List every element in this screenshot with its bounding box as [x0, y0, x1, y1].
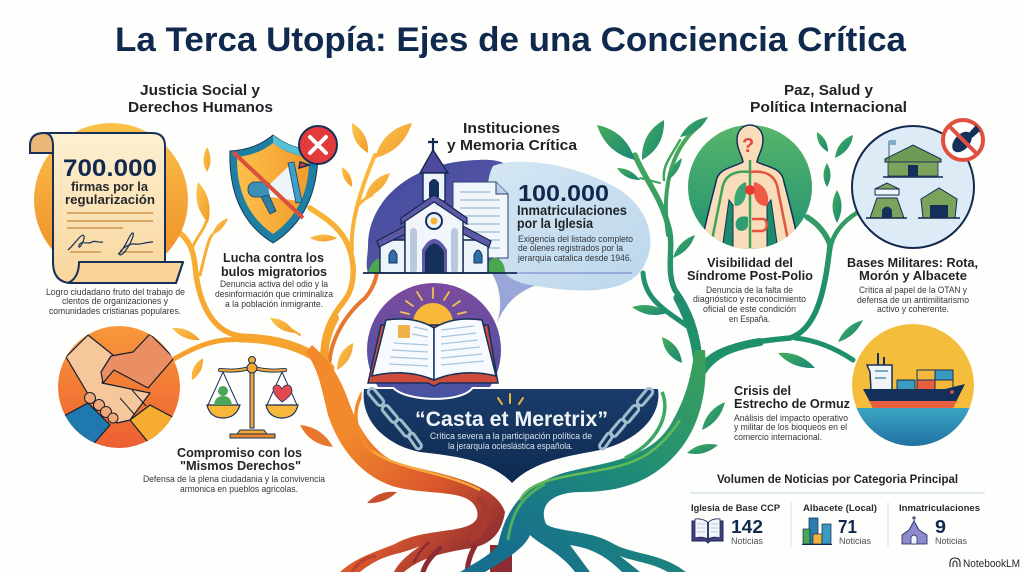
icon: church [363, 138, 517, 273]
heading: instituciones: y Memoria Crítica [447, 137, 578, 154]
description: Crítica severa a la participación política de [430, 431, 592, 441]
text: bases militares: activo y coherente. [877, 304, 949, 314]
stat: inmatriculaciones: 9 [935, 517, 946, 537]
text: crisis de ormuz: y militar de los bioqueos en el [734, 422, 847, 432]
panel: lucha contra los bulos: bulos migratorios [221, 264, 327, 279]
fingers [84, 392, 118, 423]
panel: institutions blob [367, 160, 650, 323]
heading: justicia social: Justicia Social y [140, 82, 261, 99]
panel heading: Volumen de Noticias por Categoria Principal [717, 472, 958, 486]
icon: chain left [367, 387, 423, 450]
left branches [172, 155, 377, 378]
text: 100.000 inmatriculaciones: Exigencia del listado completo [518, 234, 633, 244]
text: 100.000 inmatriculaciones: 100.000 [518, 180, 609, 206]
text: crisis de ormuz: Crisis del [734, 383, 791, 398]
text: visibilidad: Denuncia de la falta de [706, 285, 793, 295]
text: 100.000 inmatriculaciones: de olenes registrados por la [518, 243, 624, 253]
text: 100.000 inmatriculaciones: jerarquia catalica desde 1946. [517, 253, 632, 263]
arm gaps [722, 200, 778, 250]
left trunk and roots [306, 345, 505, 572]
text: 100.000 inmatriculaciones [517, 180, 633, 263]
panel: 700.000 firmas: comunidades cristianas populares. [49, 306, 181, 316]
text: visibilidad: en España. [729, 314, 770, 324]
text: compromiso: armonica en pueblos agricolas. [180, 484, 298, 494]
right arm and thumb [101, 334, 174, 388]
icon: chain right [598, 387, 654, 450]
text: visibilidad [687, 255, 813, 324]
sun rays [498, 394, 523, 404]
icon: body post-polio: ? [742, 135, 754, 157]
signatures [68, 233, 153, 255]
text: compromiso [143, 445, 326, 494]
left arm and hand [66, 335, 150, 423]
purple backdrop [367, 160, 520, 273]
text: compromiso: Defensa de la plena ciudadania y la convivencia [143, 474, 326, 484]
panel: volumen de noticias [690, 472, 985, 547]
icon: military bases [852, 126, 974, 248]
light blue callout [488, 162, 650, 291]
panel: lucha contra los bulos: desinformación que criminaliza [215, 289, 334, 299]
right leaves [597, 117, 863, 454]
panel: 700.000 firmas: clentos de organizaciones y [62, 296, 168, 306]
text: 100.000 inmatriculaciones: por la Iglesia [517, 216, 593, 231]
orange circle [34, 123, 188, 277]
panel: 700.000 firmas [30, 123, 188, 316]
yellow sleeve [130, 405, 178, 442]
panel: lucha contra los bulos [215, 126, 337, 309]
title: La Terca Utopía: Ejes de una Conciencia Crítica [115, 21, 907, 59]
panel: casta et meretrix banner [364, 389, 658, 483]
text: crisis de ormuz [734, 383, 850, 442]
text: bases militares: Bases Militares: Rota, [847, 255, 978, 270]
logo: notebooklm: NotebookLM [963, 558, 1020, 570]
icon: document [453, 182, 508, 258]
heading: paz, salud: Política Internacional [750, 99, 907, 116]
description: Logro ciudadano fruto del trabajo de [46, 287, 185, 297]
text: compromiso: "Mismos Derechos" [180, 458, 301, 473]
barracks [885, 145, 941, 162]
text: bases militares: Morón y Albacete [859, 268, 967, 283]
speech tail [490, 270, 542, 323]
icon: scales of justice [207, 356, 298, 438]
trunk centre stem [490, 545, 512, 572]
heading: instituciones [447, 120, 578, 154]
rule [690, 492, 985, 494]
stat: inmatriculaciones [899, 503, 980, 546]
stat: inmatriculaciones: Noticias [935, 536, 967, 546]
panel: lucha contra los bulos: a la población inmigrante. [225, 299, 323, 309]
stat: inmatriculaciones: Inmatriculaciones [899, 503, 980, 514]
text: crisis de ormuz: Estrecho de Ormuz [734, 396, 850, 411]
text: 100.000 inmatriculaciones: Inmatriculaciones [517, 203, 627, 218]
right branches [635, 125, 858, 390]
text lines [67, 213, 153, 252]
panel: casta et meretrix banner: la jerarquía ocieslástica española. [448, 441, 573, 451]
scroll [30, 133, 183, 283]
watchtower [875, 183, 899, 189]
text: visibilidad: oficial de este condición [703, 304, 796, 314]
icon: red alert bubble [299, 126, 337, 168]
tent [921, 188, 957, 218]
icon: body post-polio [688, 125, 812, 250]
text: bases militares: Crítica al papel de la OTAN y [859, 285, 967, 295]
divider line [517, 272, 632, 274]
stat: albacete: Albacete (Local) [803, 503, 877, 514]
text: bases militares: defensa de un antimilitarismo [857, 295, 969, 305]
stat: albacete: Noticias [839, 536, 871, 546]
icon: handshake [58, 326, 180, 448]
text: compromiso: Compromiso con los [177, 445, 302, 460]
quote: “Casta et Meretrix” [415, 407, 608, 431]
icon: no bomb [943, 120, 983, 160]
subheading: Lucha contra los [223, 250, 324, 265]
left leaves [172, 123, 412, 503]
icon: shield [230, 135, 318, 243]
hand lines [120, 390, 146, 414]
panel: 700.000 firmas: regularización [65, 193, 155, 207]
text: crisis de ormuz: Análisis del impacto operativo [734, 413, 848, 423]
stat: iglesia de base: Noticias [731, 536, 763, 546]
description: Denuncia activa del odio y la [220, 279, 329, 289]
big number: 700.000 [63, 155, 157, 182]
tree: cool right half [460, 117, 863, 572]
panel: 700.000 firmas: firmas por la [71, 180, 149, 194]
icon: container ship [850, 324, 980, 448]
heading: justicia social [128, 82, 273, 116]
text: visibilidad: Visibilidad del [707, 255, 793, 270]
text: visibilidad: Síndrome Post-Polio [687, 268, 813, 283]
text: visibilidad: diagnóstico y reconocimiento [693, 294, 806, 304]
icon: open book with sun [367, 283, 501, 417]
heading: paz, salud [750, 82, 907, 116]
text: bases militares [847, 255, 978, 314]
right trunk and roots [460, 350, 706, 572]
banner shape [364, 389, 658, 483]
heading: instituciones: Instituciones [463, 120, 560, 137]
stat: iglesia de base [691, 503, 781, 546]
stat: albacete: 71 [838, 517, 857, 537]
tree: warm left half [172, 123, 512, 572]
heading: paz, salud: Paz, Salud y [784, 82, 874, 99]
stat: iglesia de base: Iglesia de Base CCP [691, 503, 781, 514]
stat: iglesia de base: 142 [731, 517, 763, 537]
heading: justicia social: Derechos Humanos [128, 99, 273, 116]
blue sleeve [64, 403, 111, 443]
stat: albacete [802, 503, 877, 546]
text: crisis de ormuz: comercio internacional. [734, 432, 822, 442]
